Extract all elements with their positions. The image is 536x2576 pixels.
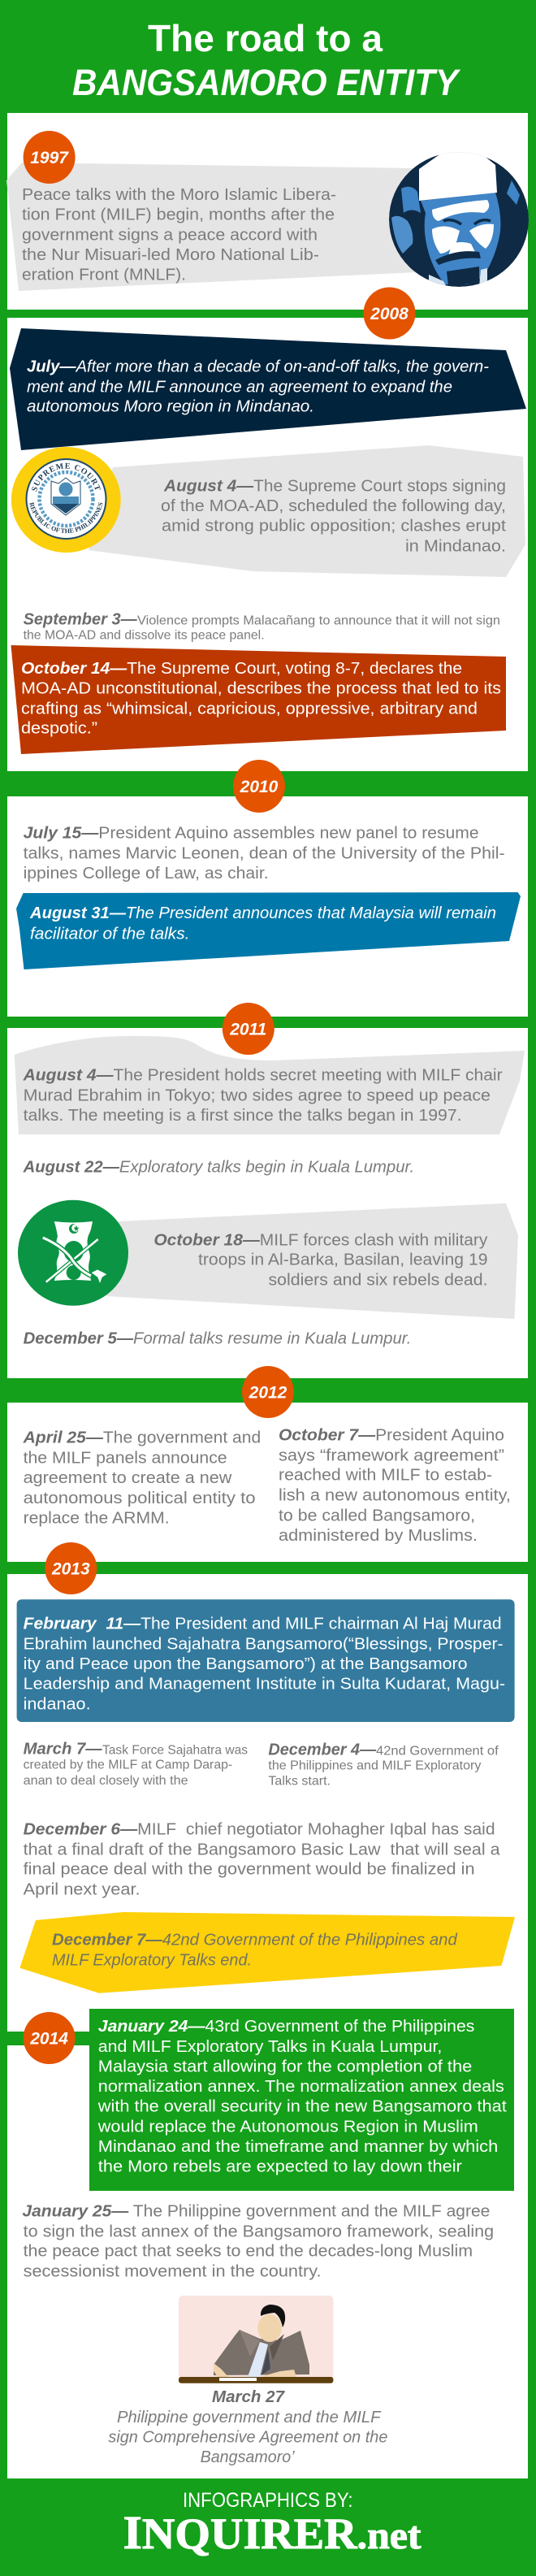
text: October 14: October 14— The Supreme Court, voting 8-7, declares the bbox=[21, 660, 462, 678]
callout: February 11 blue box bbox=[17, 1599, 515, 1722]
text: October 18: October 18— MILF forces clash with military bbox=[153, 1231, 487, 1249]
icon: Supreme Court seal: REPUBLIC OF THE PHILIPPINES bbox=[29, 502, 102, 533]
text: October 7: lish a new autonomous entity, bbox=[279, 1487, 511, 1505]
text: August 4: in Mindanao. bbox=[405, 537, 506, 555]
text: March 27: March 27 bbox=[212, 2388, 285, 2406]
text: October 18 bbox=[153, 1231, 487, 1290]
callout: August 31 blue ribbon bbox=[16, 892, 521, 969]
text: April 25: replace the ARMM. bbox=[24, 1510, 170, 1528]
text: August 31: facilitator of the talks. bbox=[30, 925, 190, 943]
text: October 14 bbox=[21, 660, 501, 738]
text: September 3: September 3— bbox=[24, 610, 138, 628]
text: 1997 peace talks: tion Front (MILF) begin, months after the bbox=[22, 206, 335, 224]
text: February 11: Leadership and Management Institute in Sulta Kudarat, Magu- bbox=[24, 1676, 505, 1693]
text: March 27: Philippine government and the MILF bbox=[117, 2409, 382, 2426]
text: December 6: final peace deal with the government would be finalized in bbox=[24, 1861, 475, 1879]
badge: 2013 bbox=[45, 1542, 97, 1594]
badge: 1997: 1997 bbox=[30, 149, 69, 167]
text: March 7: anan to deal closely with the bbox=[24, 1774, 188, 1788]
panel: 2013 and 2014 bbox=[7, 1542, 528, 2478]
text: October 14: crafting as “whimsical, capricious, oppressive, arbitrary and bbox=[21, 700, 478, 718]
text: March 7: Task Force Sajahatra was bbox=[102, 1743, 248, 1757]
footer credit: INQUIRER.net bbox=[123, 2506, 421, 2559]
text: March 7: created by the MILF at Camp Darap- bbox=[24, 1759, 232, 1772]
text: March 27 bbox=[108, 2388, 387, 2466]
text: January 25: January 25— The Philippine government and the MILF agree bbox=[22, 2202, 490, 2220]
callout: July navy ribbon bbox=[10, 328, 526, 450]
text: October 14: MOA-AD unconstitutional, describes the process that led to its bbox=[21, 680, 501, 698]
text: February 11: Ebrahim launched Sajahatra Bangsamoro(“Blessings, Prosper- bbox=[24, 1635, 504, 1653]
text: August 31: August 31—The President announces that Malaysia will remain bbox=[29, 904, 496, 922]
text: February 11: ity and Peace upon the Bangsamoro”) at the Bangsamoro bbox=[24, 1655, 468, 1673]
text: January 24: and MILF Exploratory Talks in Kuala Lumpur, bbox=[98, 2038, 442, 2056]
text: August 4 bbox=[23, 1066, 503, 1125]
badge: 1997 bbox=[24, 131, 76, 184]
text: October 7: October 7— President Aquino bbox=[279, 1426, 504, 1444]
text: January 24: with the overall security in the new Bangsamoro that bbox=[97, 2098, 507, 2116]
panel: 2012 bbox=[7, 1366, 528, 1562]
text: March 27: Bangsamoro’ bbox=[201, 2448, 295, 2466]
panel: 1997 bbox=[6, 113, 529, 310]
text: April 25: autonomous political entity to bbox=[24, 1490, 256, 1507]
text: August 4: of the MOA-AD, scheduled the following day, bbox=[161, 497, 506, 515]
text: December 6 bbox=[24, 1820, 501, 1899]
text: August 22: August 22—Exploratory talks begin in Kuala Lumpur. bbox=[23, 1159, 414, 1177]
text: October 7: administered by Muslims. bbox=[279, 1527, 478, 1545]
badge: 2010: 2010 bbox=[240, 778, 279, 796]
text: February 11: indanao. bbox=[24, 1695, 91, 1713]
text: August 4: amid strong public opposition; clashes erupt bbox=[162, 517, 506, 535]
text: October 7: reached with MILF to estab- bbox=[279, 1467, 492, 1485]
text: 1997 peace talks: government signs a peace accord with bbox=[22, 226, 318, 244]
text: August 31 bbox=[29, 904, 496, 943]
text: March 27: sign Comprehensive Agreement on the bbox=[108, 2429, 387, 2447]
callout: December 7 yellow ribbon bbox=[19, 1912, 515, 1993]
text: April 25 bbox=[23, 1429, 261, 1528]
text: September 3: Violence prompts Malacañang to announce that it will not sign bbox=[137, 614, 500, 627]
icon: Supreme Court seal bbox=[11, 447, 121, 553]
icon: MILF emblem bbox=[18, 1200, 128, 1306]
title: The road to a bbox=[148, 17, 383, 59]
text: December 6: December 6— MILF chief negotiator Mohagher Iqbal has said bbox=[24, 1820, 495, 1838]
text: January 24: January 24— 43rd Government of the Philippines bbox=[98, 2018, 474, 2036]
text: December 4: Talks start. bbox=[268, 1775, 331, 1789]
title: BANGSAMORO ENTITY bbox=[72, 62, 461, 103]
text: December 7: MILF Exploratory Talks end. bbox=[52, 1952, 252, 1970]
icon: portrait of Nur Misuari bbox=[389, 151, 529, 287]
callout: January 24 green box with connector bbox=[7, 2009, 514, 2191]
badge: 2011: 2011 bbox=[229, 1021, 266, 1039]
text: July bbox=[27, 358, 489, 416]
panel: 2008 bbox=[7, 288, 528, 771]
text: October 18: soldiers and six rebels dead. bbox=[268, 1272, 487, 1290]
callout: August 4 grey ribbon bbox=[15, 1036, 525, 1134]
callout: October 14 red ribbon bbox=[11, 645, 506, 754]
text: October 14: despotic.” bbox=[21, 720, 97, 738]
badge: 2010 bbox=[233, 760, 285, 813]
badge: 2008 bbox=[364, 288, 416, 340]
title bbox=[72, 17, 461, 103]
text: July 15: talks, names Marvic Leonen, dean of the University of the Phil- bbox=[24, 845, 505, 863]
text: December 6: April next year. bbox=[24, 1881, 140, 1899]
icon: Supreme Court seal: SUPREME COURT bbox=[32, 463, 101, 492]
text: 1997 peace talks: Peace talks with the Moro Islamic Libera- bbox=[22, 186, 336, 204]
badge: 2014: 2014 bbox=[29, 2030, 68, 2048]
panel: 2011 bbox=[7, 1003, 528, 1378]
badge: 2013: 2013 bbox=[51, 1560, 90, 1578]
text: July 15: ippines College of Law, as chair. bbox=[24, 865, 269, 883]
text: December 7 bbox=[52, 1931, 458, 1970]
text: January 24: Malaysia start allowing for the completion of the bbox=[98, 2058, 472, 2075]
badge: 2014 bbox=[24, 2012, 76, 2064]
text: 1997 peace talks bbox=[22, 186, 336, 284]
footer credit: INFOGRAPHICS BY: bbox=[183, 2489, 353, 2512]
callout: 1997 grey ribbon bbox=[6, 163, 418, 291]
text: February 11: February 11— The President and MILF chairman Al Haj Murad bbox=[24, 1615, 502, 1633]
text: December 4 bbox=[268, 1741, 499, 1789]
text: January 25: secessionist movement in the country. bbox=[24, 2263, 322, 2281]
text: December 4: the Philippines and MILF Exploratory bbox=[268, 1759, 481, 1773]
text: October 7: to be called Bangsamoro, bbox=[279, 1507, 475, 1524]
text: January 25 bbox=[22, 2202, 494, 2281]
text: January 24: normalization annex. The normalization annex deals bbox=[98, 2078, 504, 2096]
badge: 2012 bbox=[242, 1366, 294, 1418]
text: July: autonomous Moro region in Mindanao. bbox=[27, 398, 314, 416]
callout: August 4 grey ribbon bbox=[89, 445, 525, 577]
text: July: ment and the MILF announce an agreement to expand the bbox=[27, 378, 452, 396]
text: January 25: to sign the last annex of the Bangsamoro framework, sealing bbox=[24, 2223, 494, 2240]
text: October 18: troops in Al-Barka, Basilan, leaving 19 bbox=[198, 1251, 487, 1269]
text: August 4 bbox=[161, 477, 506, 555]
badge: 2008: 2008 bbox=[370, 305, 408, 323]
text: March 7: March 7— bbox=[24, 1740, 103, 1758]
text: August 4: Murad Ebrahim in Tokyo; two sides agree to speed up peace bbox=[24, 1086, 491, 1104]
text: October 7: says “framework agreement” bbox=[279, 1446, 504, 1464]
text: December 6: that a final draft of the Bangsamoro Basic Law that will seal a bbox=[24, 1841, 501, 1858]
text: January 24: would replace the Autonomous Region in Muslim bbox=[97, 2118, 478, 2136]
text: April 25: agreement to create a new bbox=[24, 1469, 232, 1487]
text: 1997 peace talks: eration Front (MNLF). bbox=[22, 267, 186, 284]
badge: 2011 bbox=[223, 1003, 274, 1055]
text: August 4: talks. The meeting is a first since the talks began in 1997. bbox=[24, 1107, 462, 1125]
text: January 24 bbox=[97, 2018, 507, 2176]
icon: man signing agreement bbox=[179, 2296, 333, 2383]
text: December 7: December 7—42nd Government of the Philippines and bbox=[52, 1931, 458, 1949]
text: July 15 bbox=[24, 825, 505, 883]
text: August 4: August 4— The President holds secret meeting with MILF chair bbox=[23, 1066, 503, 1084]
text: October 7 bbox=[279, 1426, 511, 1545]
text: January 24: Mindanao and the timeframe and manner by which bbox=[98, 2138, 498, 2156]
text: April 25: the MILF panels announce bbox=[24, 1449, 227, 1467]
text: 1997 peace talks: the Nur Misuari-led Moro National Lib- bbox=[22, 246, 319, 264]
badge: 2012: 2012 bbox=[249, 1383, 287, 1403]
text: December 4: 42nd Government of bbox=[376, 1744, 499, 1758]
text: September 3: the MOA-AD and dissolve its peace panel. bbox=[24, 629, 265, 643]
text: April 25: April 25—The government and bbox=[23, 1429, 261, 1447]
text: September 3 bbox=[24, 610, 500, 643]
text: July: July—After more than a decade of on-and-off talks, the govern- bbox=[27, 358, 489, 376]
text: February 11 bbox=[24, 1615, 505, 1713]
callout: October 18 grey ribbon bbox=[106, 1203, 518, 1319]
text: December 5: December 5—Formal talks resume in Kuala Lumpur. bbox=[24, 1330, 411, 1348]
text: December 4: December 4— bbox=[268, 1741, 377, 1759]
panel: 2010 bbox=[7, 760, 528, 1017]
text: August 4: August 4—The Supreme Court stops signing bbox=[163, 477, 506, 495]
text: January 25: the peace pact that seeks to end the decades-long Muslim bbox=[24, 2243, 473, 2261]
text: July 15: July 15—President Aquino assembles new panel to resume bbox=[24, 825, 479, 843]
text: January 24: the Moro rebels are expected to lay down their bbox=[98, 2158, 462, 2176]
text: March 7 bbox=[24, 1740, 248, 1788]
